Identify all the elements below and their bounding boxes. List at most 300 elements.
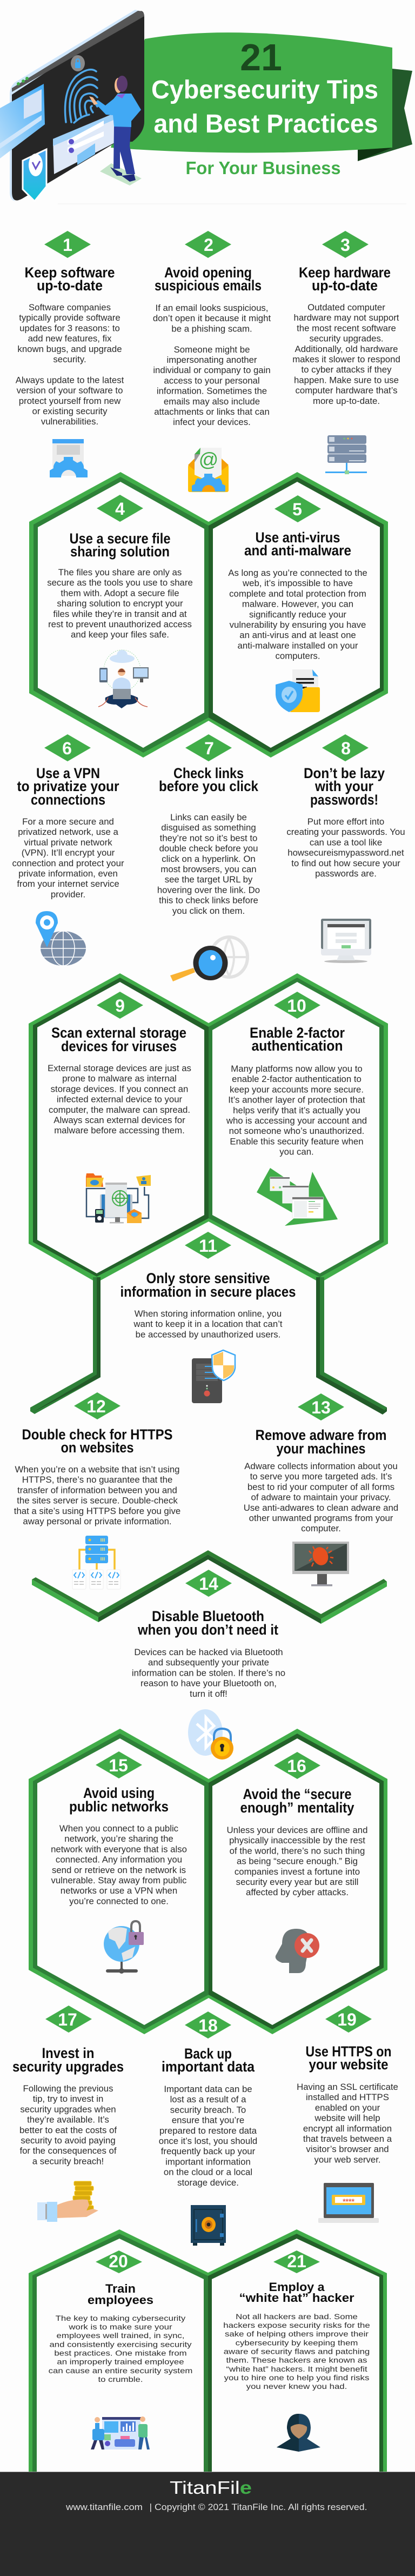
- body 10: Many platforms now allow you to: [231, 1064, 363, 1074]
- heading 5: and anti-malware: [244, 542, 351, 559]
- body 7: this to check links before: [159, 895, 258, 906]
- body 1: known bugs, and upgrade: [17, 344, 122, 354]
- body 9: External storage devices are just as: [48, 1063, 191, 1073]
- body 17: a security breach!: [32, 2156, 104, 2166]
- heading 19: Use HTTPS on: [306, 2043, 391, 2060]
- body 13: to serve you more targeted ads. It’s: [250, 1471, 392, 1482]
- title banner: [111, 32, 412, 161]
- heading 18: [162, 2046, 255, 2075]
- tip 4: [47, 495, 193, 708]
- heading 3: [299, 264, 391, 294]
- body 12: that a site’s using HTTPS before you give: [14, 1506, 180, 1516]
- body 2: individual or company to gain: [153, 365, 271, 375]
- tip 11: [120, 1232, 296, 1403]
- heading 12: on websites: [61, 1439, 134, 1456]
- heading 15: [69, 1785, 169, 1815]
- heading 8: Don’t be lazy: [304, 765, 385, 781]
- body 3: to cyber attacks if they: [302, 364, 392, 375]
- title number 21: 21: [240, 36, 282, 78]
- body 5: anti-malware installed on your: [238, 640, 358, 650]
- icon: shield and folder: [276, 669, 320, 712]
- body 17: they’re available. It’s: [27, 2115, 109, 2125]
- badge 6: 6: [62, 739, 72, 758]
- heading 10: authentication: [252, 1038, 343, 1054]
- body 12: the sites server is secure. Double-check: [17, 1496, 178, 1506]
- badge 19: 19: [337, 2010, 357, 2029]
- body 4: secure as the tools you use to share: [47, 577, 193, 588]
- body 21: hackers expose security risks for the: [223, 2321, 370, 2330]
- tip 18: [159, 2011, 257, 2246]
- body 6: connection and protect your: [12, 858, 124, 868]
- body 21: cybersecurity by keeping them: [236, 2339, 358, 2347]
- heading 17: [12, 2045, 124, 2075]
- body 11: want to keep it in a location that can’t: [133, 1319, 283, 1329]
- body 5: complete and total protection from: [229, 588, 366, 599]
- badge 16: [274, 1752, 320, 1779]
- tip 14: [132, 1570, 285, 1760]
- body 2: be a phishing scam.: [171, 323, 252, 334]
- heading 1: Keep software: [25, 264, 115, 281]
- body 13: other unwanted programs from your: [249, 1513, 393, 1523]
- badge 8: [322, 734, 369, 761]
- body 16: Unless your devices are offline and: [227, 1825, 367, 1835]
- icon: bluetooth lock: [188, 1709, 233, 1760]
- body 9: computer, the malware can spread.: [49, 1105, 190, 1115]
- heading 4: sharing solution: [70, 543, 170, 560]
- body 6: from your internet service: [17, 879, 119, 889]
- icon: magnifier over globe: [170, 937, 247, 981]
- icon: laptop with password: ****: [343, 2197, 354, 2206]
- body 11: When storing information online, you: [135, 1309, 282, 1319]
- heading 14: when you don’t need it: [137, 1622, 278, 1638]
- body 3: makes it slower to respond: [292, 354, 400, 364]
- body 8: creating your passwords. You: [286, 827, 405, 837]
- body 1: Always update to the latest: [16, 375, 124, 385]
- body 17: Following the previous: [23, 2083, 113, 2094]
- body 19: enabled on your: [315, 2102, 380, 2113]
- body 1: typically provide software: [19, 313, 121, 323]
- badge 20: [96, 2250, 142, 2273]
- heading 21: Employ a: [269, 2281, 325, 2294]
- icon: suspicious email: [188, 448, 229, 492]
- body 8: can use a tool like: [310, 837, 382, 847]
- badge 17: 17: [58, 2010, 77, 2029]
- badge 21: [273, 2250, 320, 2273]
- badge 11: 11: [199, 1236, 217, 1256]
- badge 1: 1: [63, 235, 72, 255]
- heading 9: [51, 1025, 186, 1054]
- badge 14: [185, 1570, 232, 1597]
- body 21: you to hire one to help you find risks: [224, 2374, 370, 2382]
- body 4: The files you share are only as: [58, 567, 182, 577]
- badge 16: 16: [287, 1756, 306, 1776]
- icon: globe with location pin: [36, 911, 86, 966]
- title line 1: Cybersecurity Tips: [151, 76, 378, 104]
- body 8: passwords are.: [315, 868, 377, 879]
- badge 20: 20: [109, 2252, 128, 2271]
- heading 5: Use anti-virus: [255, 529, 340, 546]
- heading 6: Use a VPN: [36, 765, 100, 781]
- body 20: The key to making cybersecurity: [56, 2314, 186, 2323]
- icon: head with error mark: [276, 1929, 319, 1973]
- body 6: virtual private network: [24, 837, 112, 847]
- heading 3: up-to-date: [312, 277, 378, 294]
- icon: suspicious email: @: [199, 448, 218, 470]
- badge 2: [185, 231, 231, 258]
- body 9: prone to malware as internal: [62, 1073, 177, 1084]
- body 9: Always scan external devices for: [53, 1115, 185, 1125]
- heading 19: your website: [309, 2056, 388, 2073]
- tip 20: [49, 2250, 192, 2449]
- body 17: better to eat the costs of: [19, 2125, 117, 2135]
- body 5: an anti-virus and at least one: [239, 630, 356, 640]
- body 3: happen. Make sure to use: [294, 375, 399, 385]
- tip 15: [51, 1751, 187, 1974]
- body 9: storage devices. If you connect an: [51, 1084, 188, 1094]
- body 8: howsecureismypassword.net: [287, 848, 404, 858]
- tip 5: [228, 495, 367, 712]
- body 2: access to your personal: [164, 375, 260, 386]
- heading 9: devices for viruses: [61, 1038, 177, 1054]
- badge 10: [274, 992, 320, 1019]
- tip 16: [227, 1752, 367, 1973]
- badge 13: 13: [311, 1398, 331, 1417]
- heading 10: [250, 1025, 345, 1054]
- heading 17: Invest in: [42, 2045, 94, 2061]
- badge 5: [275, 495, 321, 522]
- body 18: once it’s lost, you should: [159, 2136, 257, 2146]
- badge 4: [97, 495, 143, 522]
- heading 2: suspicious emails: [155, 277, 262, 294]
- body 15: networks or use a VPN when: [61, 1885, 177, 1896]
- body 14: information can be stolen. If there’s no: [132, 1668, 285, 1678]
- body 12: away personal or private information.: [23, 1516, 172, 1526]
- body 12: When you’re on a website that isn’t using: [15, 1464, 180, 1475]
- body 17: security upgrades when: [20, 2104, 116, 2114]
- body 15: you’re connected to one.: [69, 1896, 169, 1906]
- tip 3: [292, 231, 400, 474]
- body 10: not someone who’s unauthorized.: [229, 1126, 364, 1136]
- body 19: installed and HTTPS: [306, 2092, 389, 2102]
- body 5: web, it’s impossible to have: [242, 578, 353, 588]
- body 4: sharing solution to encrypt your: [57, 599, 183, 609]
- badge 1: [44, 231, 91, 258]
- body 20: an improperly trained employee: [57, 2358, 184, 2366]
- body 3: more up-to-date.: [313, 396, 380, 406]
- body 13: of adware to maintain your privacy.: [251, 1492, 391, 1503]
- badge 6: [44, 734, 91, 761]
- tip 1: [16, 231, 124, 477]
- body 3: computer hardware that’s: [295, 386, 398, 396]
- body 16: companies invest a fortune into: [235, 1867, 360, 1877]
- body 2: emails may also include: [164, 396, 260, 407]
- body 19: website will help: [314, 2113, 380, 2123]
- body 6: private information, even: [18, 868, 118, 879]
- heading 10: Enable 2-factor: [250, 1025, 345, 1041]
- icon: hooded hacker: [277, 2414, 320, 2452]
- heading 11: information in secure places: [120, 1284, 296, 1300]
- body 3: security upgrades.: [309, 334, 384, 344]
- body 1: vulnerabilities.: [41, 416, 98, 427]
- heading 13: Remove adware from: [255, 1427, 387, 1443]
- badge 2: 2: [204, 235, 213, 255]
- body 4: and keep your files safe.: [71, 629, 169, 640]
- body 20: employees well trained, in sync,: [57, 2332, 184, 2340]
- heading 3: Keep hardware: [299, 264, 391, 281]
- icon: safe: [191, 2205, 226, 2246]
- body 8: Put more effort into: [307, 816, 384, 827]
- body 20: can cause an entire security system: [49, 2367, 192, 2375]
- body 18: important information: [165, 2156, 251, 2167]
- heading 1: up-to-date: [37, 277, 103, 294]
- body 7: click on a hyperlink. On: [162, 854, 256, 864]
- body 5: vulnerability by ensuring you have: [230, 620, 366, 630]
- body 7: hovering over the link. Do: [157, 885, 260, 895]
- heading 7: before you click: [159, 778, 258, 794]
- heading 13: your machines: [277, 1440, 365, 1457]
- body 15: send or retrieve on the network is: [52, 1865, 186, 1875]
- body 1: protect yourself from new: [19, 396, 121, 406]
- badge 12: [74, 1392, 121, 1419]
- body 14: and subsequently your private: [148, 1657, 269, 1668]
- body 5: significantly reduce your: [249, 609, 346, 620]
- tip 6: [12, 734, 124, 966]
- body 7: you click on them.: [172, 906, 245, 916]
- body 21: sake of helping others improve their: [225, 2330, 369, 2339]
- heading 21: “white hat” hacker: [239, 2292, 354, 2305]
- badge 3: [322, 231, 369, 258]
- website: www.titanfile.com: [65, 2502, 143, 2512]
- badge 10: 10: [287, 996, 306, 1015]
- body 13: Adware collects information about you: [244, 1461, 398, 1471]
- body 18: frequently back up your: [161, 2146, 256, 2156]
- body 19: encrypt all information: [303, 2123, 392, 2134]
- badge 3: 3: [340, 235, 350, 255]
- body 7: disguised as something: [161, 822, 256, 833]
- body 21: you never knew you had.: [246, 2382, 347, 2391]
- body 6: For a more secure and: [22, 816, 114, 827]
- badge 15: [96, 1751, 142, 1778]
- icon: laptop with password: [318, 2183, 379, 2223]
- body 5: malware. However, you can: [242, 599, 353, 609]
- body 10: Enable this security feature when: [230, 1136, 364, 1146]
- body 1: Software companies: [29, 302, 111, 313]
- body 1: or existing security: [32, 406, 108, 416]
- body 6: (VPN). It’ll encrypt your: [22, 848, 115, 858]
- body 18: lost as a result of a: [170, 2094, 246, 2104]
- heading 6: connections: [31, 792, 105, 808]
- body 21: Not all hackers are bad. Some: [236, 2313, 358, 2321]
- body 13: best to rid your computer of all forms: [247, 1482, 394, 1492]
- heading 20: [88, 2282, 153, 2307]
- badge 8: 8: [341, 739, 351, 758]
- icon: authentication windows: [257, 1168, 338, 1226]
- body 9: infected external device to your: [57, 1094, 183, 1105]
- badge 13: [298, 1393, 344, 1420]
- body 2: information. Sometimes the: [157, 386, 267, 396]
- badge 19: [325, 2006, 372, 2033]
- body 3: the most recent software: [297, 323, 396, 333]
- heading 15: public networks: [69, 1798, 169, 1815]
- icon: scanning external devices: [86, 1173, 151, 1223]
- tip 8: [286, 734, 405, 963]
- body 19: Having an SSL certificate: [297, 2082, 398, 2092]
- body 2: attachments or links that can: [154, 407, 270, 417]
- body 7: Links can easily be: [170, 812, 247, 822]
- body 4: files while they’re in transit and at: [53, 609, 187, 619]
- body 2: don’t open it because it might: [153, 313, 271, 323]
- hexagon frame: tips 4 and 5: [29, 472, 388, 758]
- body 7: most browsers, you can: [160, 864, 257, 874]
- icon: software update: [50, 439, 88, 477]
- body 1: version of your software to: [17, 386, 123, 396]
- subtitle: For Your Business: [186, 158, 340, 178]
- body 19: your web server.: [314, 2154, 381, 2165]
- body 6: privatized network, use a: [18, 827, 118, 837]
- icon: hand holding coins: [37, 2181, 98, 2222]
- heading 12: Double check for HTTPS: [22, 1426, 173, 1443]
- body 18: on the cloud or a local: [164, 2167, 252, 2177]
- body 20: and consistently exercising security: [49, 2341, 192, 2349]
- footer: [0, 2472, 415, 2576]
- heading 11: [120, 1270, 296, 1300]
- heading 9: Scan external storage: [51, 1025, 186, 1041]
- body 14: Devices can be hacked via Bluetooth: [134, 1647, 283, 1657]
- tip 13: [244, 1393, 398, 1586]
- heading 18: important data: [162, 2059, 255, 2075]
- body 21: aware of security flaws and patching: [224, 2348, 370, 2356]
- body 10: enable 2-factor authentication to: [232, 1074, 362, 1084]
- body 10: helps verify that it’s actually you: [233, 1105, 360, 1116]
- body 15: network with everyone that is also: [51, 1844, 187, 1854]
- heading 8: with your: [314, 778, 373, 794]
- body 7: double check before you: [159, 844, 258, 854]
- body 4: rest to prevent unauthorized access: [48, 619, 192, 629]
- body 18: Important data can be: [164, 2084, 252, 2094]
- heading 16: Avoid the “secure: [243, 1786, 351, 1802]
- body 8: to find out how secure your: [291, 858, 400, 868]
- body 16: security every year but are still: [236, 1877, 358, 1887]
- body 12: transfer of information between you and: [17, 1485, 177, 1495]
- header hero: [0, 10, 412, 204]
- body 17: security to avoid paying: [21, 2135, 116, 2146]
- body 21: them. These hackers are known as: [226, 2356, 367, 2365]
- body 1: add new features, fix: [28, 334, 112, 344]
- body 5: As long as you’re connected to the: [228, 568, 367, 578]
- body 17: for the consequences of: [19, 2146, 117, 2156]
- body 3: Additionally, old hardware: [295, 344, 398, 354]
- icon: server rack: [325, 435, 367, 474]
- heading 8: passwords!: [310, 792, 378, 808]
- badge 4: 4: [115, 499, 125, 519]
- body 3: Outdated computer: [307, 302, 385, 313]
- heading 7: Check links: [173, 765, 244, 781]
- heading 21: [239, 2281, 354, 2305]
- body 2: Someone might be: [174, 344, 250, 355]
- heading 19: [306, 2043, 391, 2073]
- heading 20: employees: [88, 2294, 153, 2307]
- body 10: keep your accounts more secure.: [230, 1084, 364, 1094]
- badge 17: [45, 2006, 92, 2033]
- icon: globe with padlock: [104, 1921, 144, 1974]
- body 16: affected by cyber attacks.: [246, 1887, 349, 1897]
- heading 13: [255, 1427, 387, 1457]
- tip 9: [48, 992, 191, 1223]
- badge 7: 7: [204, 739, 214, 758]
- body 15: network, you’re sharing the: [64, 1834, 173, 1844]
- body 18: security breach. To: [170, 2104, 246, 2115]
- tip 10: [226, 992, 367, 1226]
- heading 11: Only store sensitive: [146, 1270, 270, 1286]
- badge 21: 21: [287, 2252, 306, 2271]
- badge 14: 14: [199, 1574, 218, 1594]
- tip 17: [12, 2006, 124, 2222]
- body 20: to crumble.: [98, 2375, 143, 2384]
- icon: password monitor: [321, 919, 371, 963]
- tip 12: [14, 1392, 180, 1589]
- heading 8: [304, 765, 385, 808]
- icon: malware on monitor: [292, 1542, 349, 1586]
- body 2: infect your devices.: [173, 417, 251, 427]
- body 10: It’s another layer of protection that: [228, 1095, 365, 1105]
- body 3: hardware may not support: [294, 313, 399, 323]
- zigzag divider: tip 14: [32, 1550, 387, 1624]
- body 15: vulnerable. Stay away from public: [51, 1875, 186, 1885]
- heading 1: [25, 264, 115, 294]
- badge 9: [97, 992, 143, 1019]
- icon: employees at dashboard: [91, 2416, 150, 2449]
- tip 21: [223, 2250, 370, 2452]
- heading 16: [240, 1786, 354, 1816]
- body 6: provider.: [51, 889, 85, 899]
- body 7: see the target URL by: [165, 874, 253, 885]
- badge 18: [185, 2011, 231, 2039]
- body 17: tip, try to invest in: [33, 2094, 103, 2104]
- body 12: HTTPS, there’s no guarantee that the: [22, 1475, 172, 1485]
- heading 17: security upgrades: [12, 2059, 124, 2075]
- body 7: they’re not so it’s best to: [160, 833, 257, 843]
- tip 19: [297, 2006, 398, 2223]
- body 11: be accessed by unauthorized users.: [136, 1329, 280, 1339]
- heading 4: [69, 530, 171, 560]
- tip 2: [153, 231, 271, 492]
- body 5: computers.: [275, 651, 320, 661]
- badge 11: [185, 1232, 231, 1259]
- badge 5: 5: [292, 500, 302, 519]
- body 10: who is accessing your account and: [226, 1116, 367, 1126]
- body 15: When you connect to a public: [59, 1823, 178, 1834]
- body 14: reason to have your Bluetooth on,: [140, 1678, 277, 1689]
- heading 7: [159, 765, 258, 794]
- body 1: updates for 3 reasons: to: [19, 323, 120, 333]
- body 16: physically inaccessible by the rest: [229, 1835, 365, 1845]
- body 4: them with. Adopt a secure file: [61, 588, 179, 598]
- body 20: work is to make sure your: [68, 2323, 172, 2332]
- heading 12: [22, 1426, 173, 1456]
- badge 12: 12: [86, 1397, 106, 1416]
- body 19: that travels between a: [303, 2134, 392, 2144]
- heading 2: [155, 264, 262, 294]
- title line 2: and Best Practices: [153, 110, 378, 138]
- copyright: | Copyright © 2021 TitanFile Inc. All rights reserved.: [149, 2502, 367, 2512]
- hexagon frame: tips 9, 10 and 11: [29, 973, 388, 1415]
- body 18: prepared to restore data: [159, 2126, 257, 2136]
- body 10: you can.: [279, 1147, 314, 1157]
- body 21: “white hat” hackers. It might benefit: [226, 2365, 367, 2373]
- heading 18: Back up: [184, 2046, 232, 2062]
- heading 6: to privatize your: [17, 778, 119, 794]
- body 18: ensure that you’re: [172, 2115, 244, 2126]
